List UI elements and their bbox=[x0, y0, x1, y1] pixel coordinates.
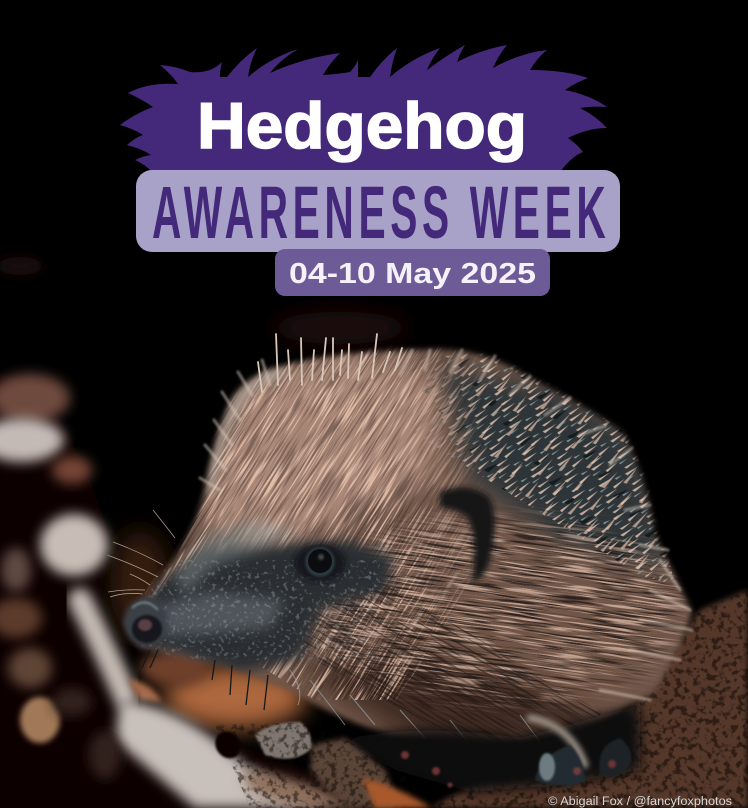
hedgehog body bbox=[107, 333, 695, 742]
dark chip bbox=[210, 727, 246, 763]
ear bbox=[440, 487, 495, 582]
eye bbox=[294, 544, 346, 582]
streaks: flank fur bbox=[317, 506, 690, 712]
logo: purple spiky hedgehog back bbox=[120, 45, 607, 172]
logo: lilac banner bbox=[136, 170, 620, 252]
pale left fringe bbox=[207, 370, 285, 490]
grey stone bbox=[255, 722, 312, 759]
chin bristles bbox=[142, 650, 268, 710]
head and snout shading bbox=[125, 540, 395, 672]
right paw bbox=[535, 745, 585, 786]
orange wood bbox=[362, 778, 432, 808]
whiskers bbox=[107, 510, 175, 597]
second paw bbox=[599, 738, 631, 776]
blurred twig over the foot bbox=[530, 718, 585, 765]
ground: bark at lower right bbox=[430, 590, 748, 808]
logo: Awareness Week wordmark: AWARENESS WEEK bbox=[152, 171, 606, 254]
logo bbox=[120, 45, 620, 296]
underbelly and front feet bbox=[340, 705, 640, 792]
log: blurred foreground wood bbox=[0, 372, 435, 808]
bark grain bbox=[216, 722, 396, 808]
pale bristles near chin bbox=[290, 670, 540, 745]
quills on the back bbox=[400, 352, 675, 585]
streaks: lower fur bbox=[298, 582, 602, 739]
photo credit: © Abigail Fox / @fancyfoxphotos bbox=[548, 796, 732, 808]
nose bbox=[124, 598, 168, 646]
crest spikes along the top outline bbox=[200, 334, 692, 700]
rear claws in shadow bbox=[401, 751, 452, 788]
logo: date: 04-10 May 2025 bbox=[289, 258, 536, 290]
background glow behind the hedgehog bbox=[0, 257, 410, 729]
logo: date pill bbox=[275, 249, 550, 296]
streaks: forehead fur bbox=[144, 346, 484, 700]
logo: Hedgehog wordmark: Hedgehog bbox=[197, 89, 527, 162]
crumbled bark bbox=[310, 738, 400, 808]
